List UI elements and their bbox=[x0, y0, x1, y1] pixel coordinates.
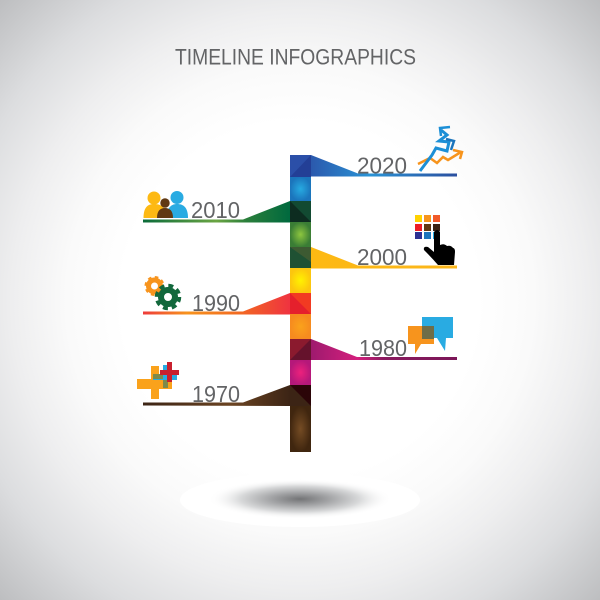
year 2000: 2000 bbox=[357, 244, 407, 270]
icon: speech bubbles bbox=[408, 317, 453, 354]
icon: colour grid with pointing hand bbox=[415, 215, 455, 265]
icon: plus signs bbox=[137, 362, 179, 399]
flag: 2010 bbox=[143, 197, 290, 223]
flag: 1970 bbox=[143, 381, 290, 407]
icon: gears bbox=[146, 278, 180, 308]
icon: rising arrows bbox=[418, 127, 462, 171]
year 2020: 2020 bbox=[357, 152, 407, 178]
year 2010: 2010 bbox=[191, 197, 240, 223]
flag: 2000 bbox=[311, 244, 457, 270]
flag: 1990 bbox=[143, 290, 290, 316]
year 1970: 1970 bbox=[192, 381, 240, 407]
year 1990: 1990 bbox=[192, 290, 240, 316]
flag: 2020 bbox=[311, 152, 457, 178]
icon: people bbox=[144, 191, 188, 218]
year 1980: 1980 bbox=[359, 335, 407, 361]
floor shadow bbox=[180, 473, 420, 527]
flag: 1980 bbox=[311, 335, 457, 361]
timeline column bbox=[290, 155, 311, 452]
title: TIMELINE INFOGRAPHICS bbox=[175, 44, 416, 70]
